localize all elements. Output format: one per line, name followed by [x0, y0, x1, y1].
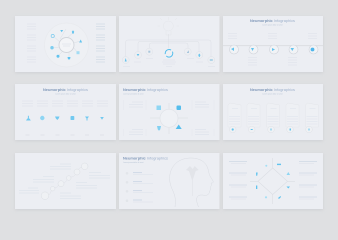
timeline text blocks	[228, 34, 317, 65]
panel: head with lightbulb	[119, 153, 220, 209]
radial wheel	[44, 23, 88, 67]
right text column	[96, 24, 105, 62]
list markers	[126, 172, 128, 202]
column icons	[26, 116, 104, 120]
four blue icons	[156, 106, 182, 131]
card badges	[229, 126, 312, 133]
title: Neumorphic Infographics	[250, 18, 295, 23]
brain bulb	[186, 166, 199, 196]
connector lines	[126, 34, 211, 57]
timeline nodes	[230, 45, 318, 54]
wave text	[19, 164, 110, 198]
subtitle: Lorem ipsum dolor sit amet	[55, 92, 76, 95]
subtitle: Lorem ipsum dolor sit amet	[123, 161, 144, 164]
left text	[229, 162, 247, 199]
cards	[228, 103, 318, 127]
title: Neumorphic Infographics	[123, 156, 168, 160]
centre ring	[150, 103, 188, 134]
nodes with icons	[122, 48, 215, 64]
panel: lightbulb connector diagram	[119, 16, 220, 72]
subtitle: Lorem ipsum dolor sit amet	[262, 92, 283, 95]
node labels	[123, 58, 215, 66]
column labels	[26, 134, 104, 136]
panel: four icons around centre	[119, 84, 220, 140]
panel: five cards	[223, 84, 323, 140]
icons: eight blue glyphs	[50, 30, 82, 59]
head outline	[170, 158, 213, 207]
panel: stepped wave	[15, 153, 116, 209]
wave nodes	[41, 163, 88, 200]
card text	[229, 108, 318, 124]
blue icons	[256, 164, 290, 199]
network lines	[250, 158, 295, 204]
panel: horizontal timeline	[223, 16, 323, 72]
list text	[133, 173, 153, 202]
column text	[22, 101, 108, 106]
subtitle: Lorem ipsum dolor sit amet	[262, 24, 283, 26]
panel: six column icons	[15, 84, 116, 140]
panel: diamond network	[223, 153, 323, 209]
title: Neumorphic Infographics	[123, 87, 168, 92]
title: Neumorphic Infographics	[43, 87, 88, 92]
panel: radial eight-step diagram	[15, 16, 116, 72]
text boxes	[124, 100, 214, 136]
timeline bar	[223, 44, 323, 47]
lightbulb	[158, 17, 179, 35]
left text column	[27, 24, 36, 62]
subtitle: Lorem ipsum dolor sit amet	[123, 92, 144, 95]
wave path	[48, 167, 83, 195]
right text	[299, 162, 317, 199]
title: Neumorphic Infographics	[250, 87, 295, 92]
